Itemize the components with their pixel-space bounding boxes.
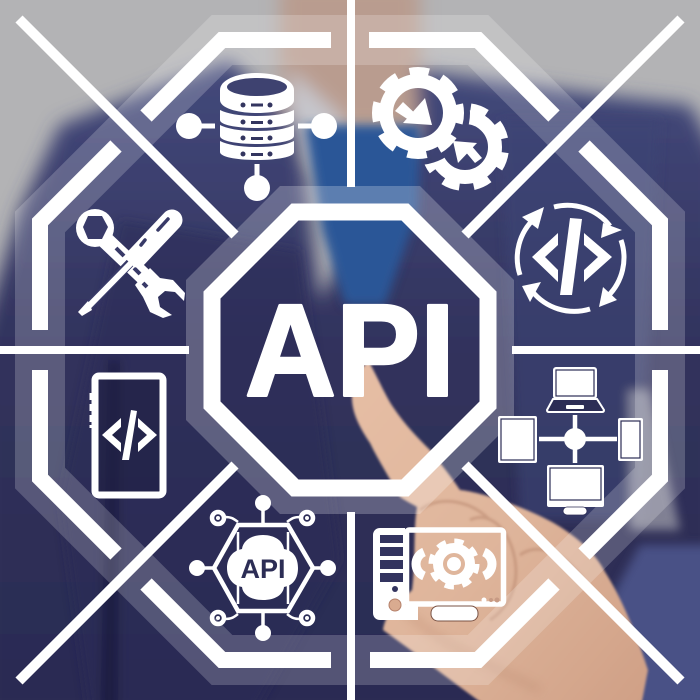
icon: gears with arrows [369, 64, 510, 192]
icon: code with circular arrows [517, 205, 624, 311]
icon: API hexagon with nodes: API [240, 554, 286, 584]
icon: API hexagon with nodes [189, 495, 336, 641]
hand pressing the API button [352, 362, 648, 700]
translucent outer octagon band [40, 40, 660, 660]
outer octagon segments [40, 40, 660, 660]
icon: phone with code [91, 376, 163, 495]
icon: database with nodes [176, 73, 337, 201]
central API heading: API [245, 276, 455, 424]
translucent central octagon band [186, 186, 514, 514]
icon: wrench and screwdriver [76, 209, 185, 318]
icon: computer with settings gear [373, 528, 504, 621]
icon: connected devices network [498, 367, 643, 515]
central octagon button [212, 212, 488, 488]
